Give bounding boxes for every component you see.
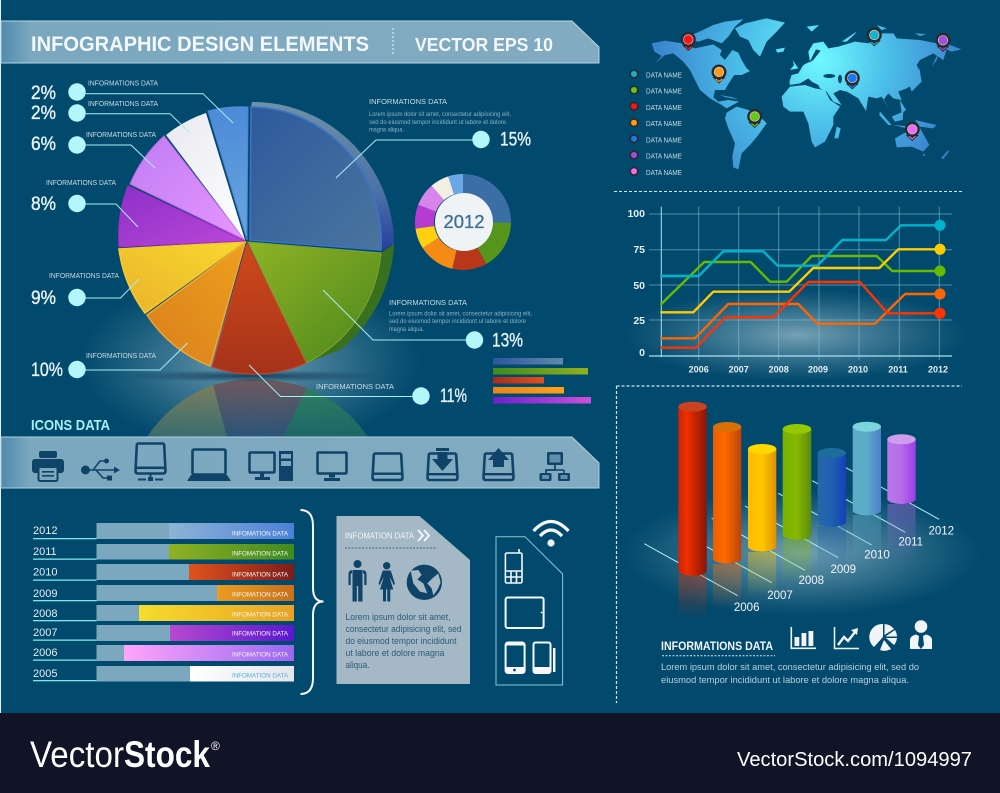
- world map: eurasia africa oceania: [782, 25, 962, 159]
- reflections: [678, 504, 916, 620]
- row 2005: INFOMATION DATA: [232, 672, 289, 680]
- x axis labels: 2006: [689, 364, 709, 374]
- y axis labels: 100: [627, 208, 645, 220]
- bar chart description: eiusmod tempor incididunt ut labore et dolore magna aliqua.: [661, 675, 909, 685]
- icon: laptop: [187, 450, 231, 481]
- callout 2% top: INFORMATIONS DATA: [88, 80, 158, 88]
- pin: red: [681, 32, 696, 51]
- cylinder 2006 red: [678, 402, 707, 576]
- callout 2% top: 2%: [31, 83, 56, 104]
- donut chart 2012: 2012: [444, 212, 484, 232]
- row 2009: INFOMATION DATA: [232, 592, 289, 598]
- footer: Stock: [124, 734, 210, 775]
- callout 9%: INFORMATIONS DATA: [49, 273, 119, 280]
- icon: printer: [32, 451, 64, 481]
- cylinder 2011 light blue: [853, 422, 881, 515]
- x axis labels: 2012: [928, 364, 948, 374]
- panel heading: INFOMATION DATA: [345, 532, 415, 540]
- callout 15%: 15%: [500, 130, 531, 150]
- horizontal year bars: [33, 523, 294, 682]
- legend item purple: DATA NAME: [646, 154, 682, 160]
- subtitle: VECTOR EPS 10: [415, 34, 553, 55]
- callout 8%: 8%: [31, 194, 56, 215]
- info panel: [336, 516, 470, 684]
- pie chart: [119, 102, 394, 374]
- callout 13%: magna aliqua.: [389, 327, 424, 333]
- callout 11%: 11%: [440, 386, 467, 407]
- legend item pink: DATA NAME: [646, 170, 682, 177]
- map legend: [629, 69, 682, 177]
- icon: keypad phone: [505, 549, 522, 583]
- row 2010: 2010: [33, 566, 57, 578]
- series: teal: [661, 220, 946, 276]
- series: orange: [661, 288, 946, 338]
- row 2008: INFOMATION DATA: [232, 612, 289, 618]
- series: red: [661, 282, 946, 348]
- chart glow: [625, 289, 969, 381]
- slice: green rim: [306, 244, 394, 363]
- callout 13%: Lorem ipsum dolor sit amet, consectetur adipisicing elit,: [389, 312, 532, 318]
- icon: chevrons: [418, 530, 429, 541]
- pie reflection: [147, 379, 368, 437]
- watermark id: VectorStock.com/1094997: [737, 749, 972, 771]
- bar chart glow: [624, 490, 980, 616]
- callout 13%: 13%: [492, 330, 523, 352]
- x axis labels: [689, 364, 948, 374]
- icon: line chart: [834, 627, 859, 648]
- callout 11%: INFORMATIONS DATA: [316, 384, 394, 391]
- year labels: 2006: [734, 602, 759, 614]
- row 2011: INFOMATION DATA: [232, 550, 289, 558]
- callout 10%: INFORMATIONS DATA: [86, 353, 156, 360]
- row 2007: INFOMATION DATA: [232, 630, 289, 638]
- row 2009: 2009: [33, 588, 57, 600]
- callout 11%: [249, 365, 467, 407]
- callout 6%: [31, 132, 156, 168]
- row 2012: 2012: [33, 525, 57, 537]
- cylinder 2010 blue: [818, 448, 846, 527]
- row 2008: [33, 605, 294, 621]
- slice: orange: [147, 243, 245, 366]
- pie chart glow: [80, 274, 420, 450]
- donut chart 2012: [424, 184, 502, 260]
- icon: hard drive: [372, 454, 402, 480]
- row 2006: [33, 645, 294, 661]
- left edge strip: [0, 0, 1, 713]
- 3d bar chart: [640, 402, 964, 616]
- icon: woman: [378, 562, 395, 602]
- legend item orange: DATA NAME: [646, 121, 682, 128]
- brace: [300, 510, 324, 694]
- year labels: 2012: [929, 526, 954, 538]
- pin: blue: [845, 70, 860, 90]
- icon: man: [348, 560, 366, 602]
- small legend bars: [493, 358, 591, 404]
- callout 15%: magna aliqua.: [369, 128, 404, 134]
- body text: Lorem ipsum dolor sit amet, consectetur adipisicing elit, sed do: [661, 662, 919, 672]
- x axis labels: 2008: [769, 364, 789, 374]
- heading: INFORMATIONS DATA: [661, 641, 773, 653]
- row 2012: [33, 523, 294, 539]
- icon: stylus phone: [534, 642, 555, 673]
- cylinder 2012 purple: [887, 434, 916, 504]
- slice: green: [248, 242, 381, 363]
- callout 9%: [31, 273, 139, 309]
- row 2007: 2007: [33, 627, 57, 639]
- icon: usb: [81, 458, 120, 480]
- slice: light blue: [208, 107, 248, 240]
- slice: yellow: [119, 242, 244, 313]
- panel body text: aliqua.: [346, 660, 370, 670]
- x axis labels: 2011: [888, 364, 908, 374]
- x axis labels: 2010: [848, 364, 868, 374]
- icon: monitor: [318, 452, 346, 481]
- callout 2% second: [31, 101, 190, 133]
- footer: [0, 713, 1000, 793]
- header banner: [1, 21, 599, 63]
- title: INFOGRAPHIC DESIGN ELEMENTS: [31, 33, 369, 56]
- icon: upload: [484, 448, 514, 480]
- icon: smartphone: [506, 642, 525, 673]
- device panel: [496, 522, 568, 685]
- row 2011: [33, 544, 294, 560]
- year labels: 2007: [767, 590, 793, 602]
- legend item green: DATA NAME: [646, 88, 682, 96]
- series: green: [661, 256, 946, 304]
- row 2008: 2008: [33, 608, 57, 620]
- y axis labels: [627, 208, 645, 359]
- callout 10%: [31, 343, 188, 381]
- callout 2% second: 2%: [31, 103, 56, 124]
- callout 15%: INFORMATIONS DATA: [369, 99, 447, 106]
- series: yellow: [661, 244, 946, 312]
- axis lines: [644, 468, 939, 596]
- icon: globe: [407, 565, 442, 600]
- icon: pie chart: [869, 624, 897, 651]
- year labels: 2010: [864, 550, 890, 562]
- row 2006: 2006: [33, 647, 57, 659]
- icon: network drive: [136, 444, 166, 481]
- icon: bar chart: [790, 627, 816, 649]
- panel body text: Lorem ipsum dolor sit amet,: [346, 612, 450, 622]
- callout 15%: Lorem ipsum dolor sit amet, consectetur adipisicing elit,: [369, 112, 511, 118]
- panel body text: [346, 612, 462, 670]
- year labels: 2008: [799, 575, 824, 587]
- row 2011: 2011: [33, 546, 57, 558]
- callout 2% second: INFORMATIONS DATA: [88, 101, 158, 108]
- row 2007: [33, 625, 294, 641]
- cylinder 2007 orange: [713, 422, 741, 564]
- callout 8%: INFORMATIONS DATA: [46, 180, 116, 187]
- legend item teal: DATA NAME: [646, 72, 682, 80]
- callout 8%: [31, 180, 138, 227]
- slice: light purple: [130, 136, 245, 240]
- icons band: [1, 437, 599, 488]
- row 2010: INFOMATION DATA: [232, 572, 289, 578]
- year labels: 2011: [898, 536, 923, 548]
- callout 6%: INFORMATIONS DATA: [86, 132, 156, 139]
- callout 15%: sed do eiusmod tempor incididunt ut labore et dolore: [369, 120, 507, 126]
- row 2012: INFOMATION DATA: [232, 530, 289, 538]
- world map: americas and greenland: [652, 18, 785, 169]
- row 2009: [33, 585, 294, 601]
- slice: blue rim: [251, 102, 394, 251]
- footer: ®: [211, 739, 220, 753]
- callout 9%: 9%: [31, 288, 56, 309]
- year labels: [734, 526, 954, 614]
- year labels: 2009: [831, 564, 856, 576]
- icon: network: [540, 452, 570, 481]
- pin: pink: [905, 122, 920, 141]
- callout 15%: [336, 99, 531, 178]
- watermark logo: Vector: [30, 734, 124, 775]
- panel body text: ut labore et dolore magna: [346, 648, 445, 658]
- pin: green: [747, 109, 762, 128]
- grid: [649, 207, 952, 360]
- legend item red: DATA NAME: [646, 105, 682, 112]
- cylinder 2009 green: [783, 424, 811, 540]
- pin: purple: [936, 33, 950, 52]
- row 2005: 2005: [33, 668, 57, 680]
- row 2010: [33, 564, 294, 581]
- x axis labels: 2007: [729, 364, 749, 374]
- slice: white: [166, 113, 245, 240]
- callout 2% top: [31, 80, 233, 123]
- map inland seas: [809, 49, 842, 83]
- callout 13%: INFORMATIONS DATA: [389, 300, 467, 307]
- row 2005: [33, 666, 294, 682]
- slice: red: [212, 243, 306, 374]
- pin: teal: [867, 28, 882, 46]
- dashed frame: [616, 386, 962, 703]
- callout 13%: [323, 290, 532, 352]
- legend item blue: DATA NAME: [646, 138, 682, 144]
- callout 6%: 6%: [31, 134, 56, 155]
- pie shadow: [117, 370, 387, 382]
- slice: purple: [119, 186, 245, 247]
- icon: desktop computer: [250, 451, 293, 481]
- y axis labels: 50: [633, 280, 645, 292]
- y axis labels: 0: [639, 347, 645, 359]
- heading: icons data: ICONS DATA: [31, 417, 110, 434]
- icon: tablet: [506, 598, 544, 628]
- callout 10%: 10%: [31, 360, 63, 381]
- map pins: [681, 28, 950, 141]
- icon: wifi: [534, 522, 568, 547]
- x axis labels: 2009: [808, 364, 828, 374]
- slice: blue: [250, 107, 381, 250]
- line chart: [625, 207, 969, 381]
- panel body text: consectetur adipisicing elit, sed: [346, 624, 462, 634]
- y axis labels: 25: [633, 315, 645, 327]
- icon: business person: [910, 620, 932, 649]
- icon: download: [428, 448, 458, 480]
- y axis labels: 75: [633, 244, 645, 256]
- panel body text: do eiusmod tempor incididunt: [346, 636, 457, 646]
- pin: orange: [712, 64, 726, 84]
- row 2006: INFOMATION DATA: [232, 652, 289, 658]
- cylinder 2008 yellow: [748, 444, 776, 552]
- callout 13%: sed do eiusmod tempor incididunt ut labore et dolore: [389, 319, 527, 325]
- bar chart description: [661, 641, 919, 685]
